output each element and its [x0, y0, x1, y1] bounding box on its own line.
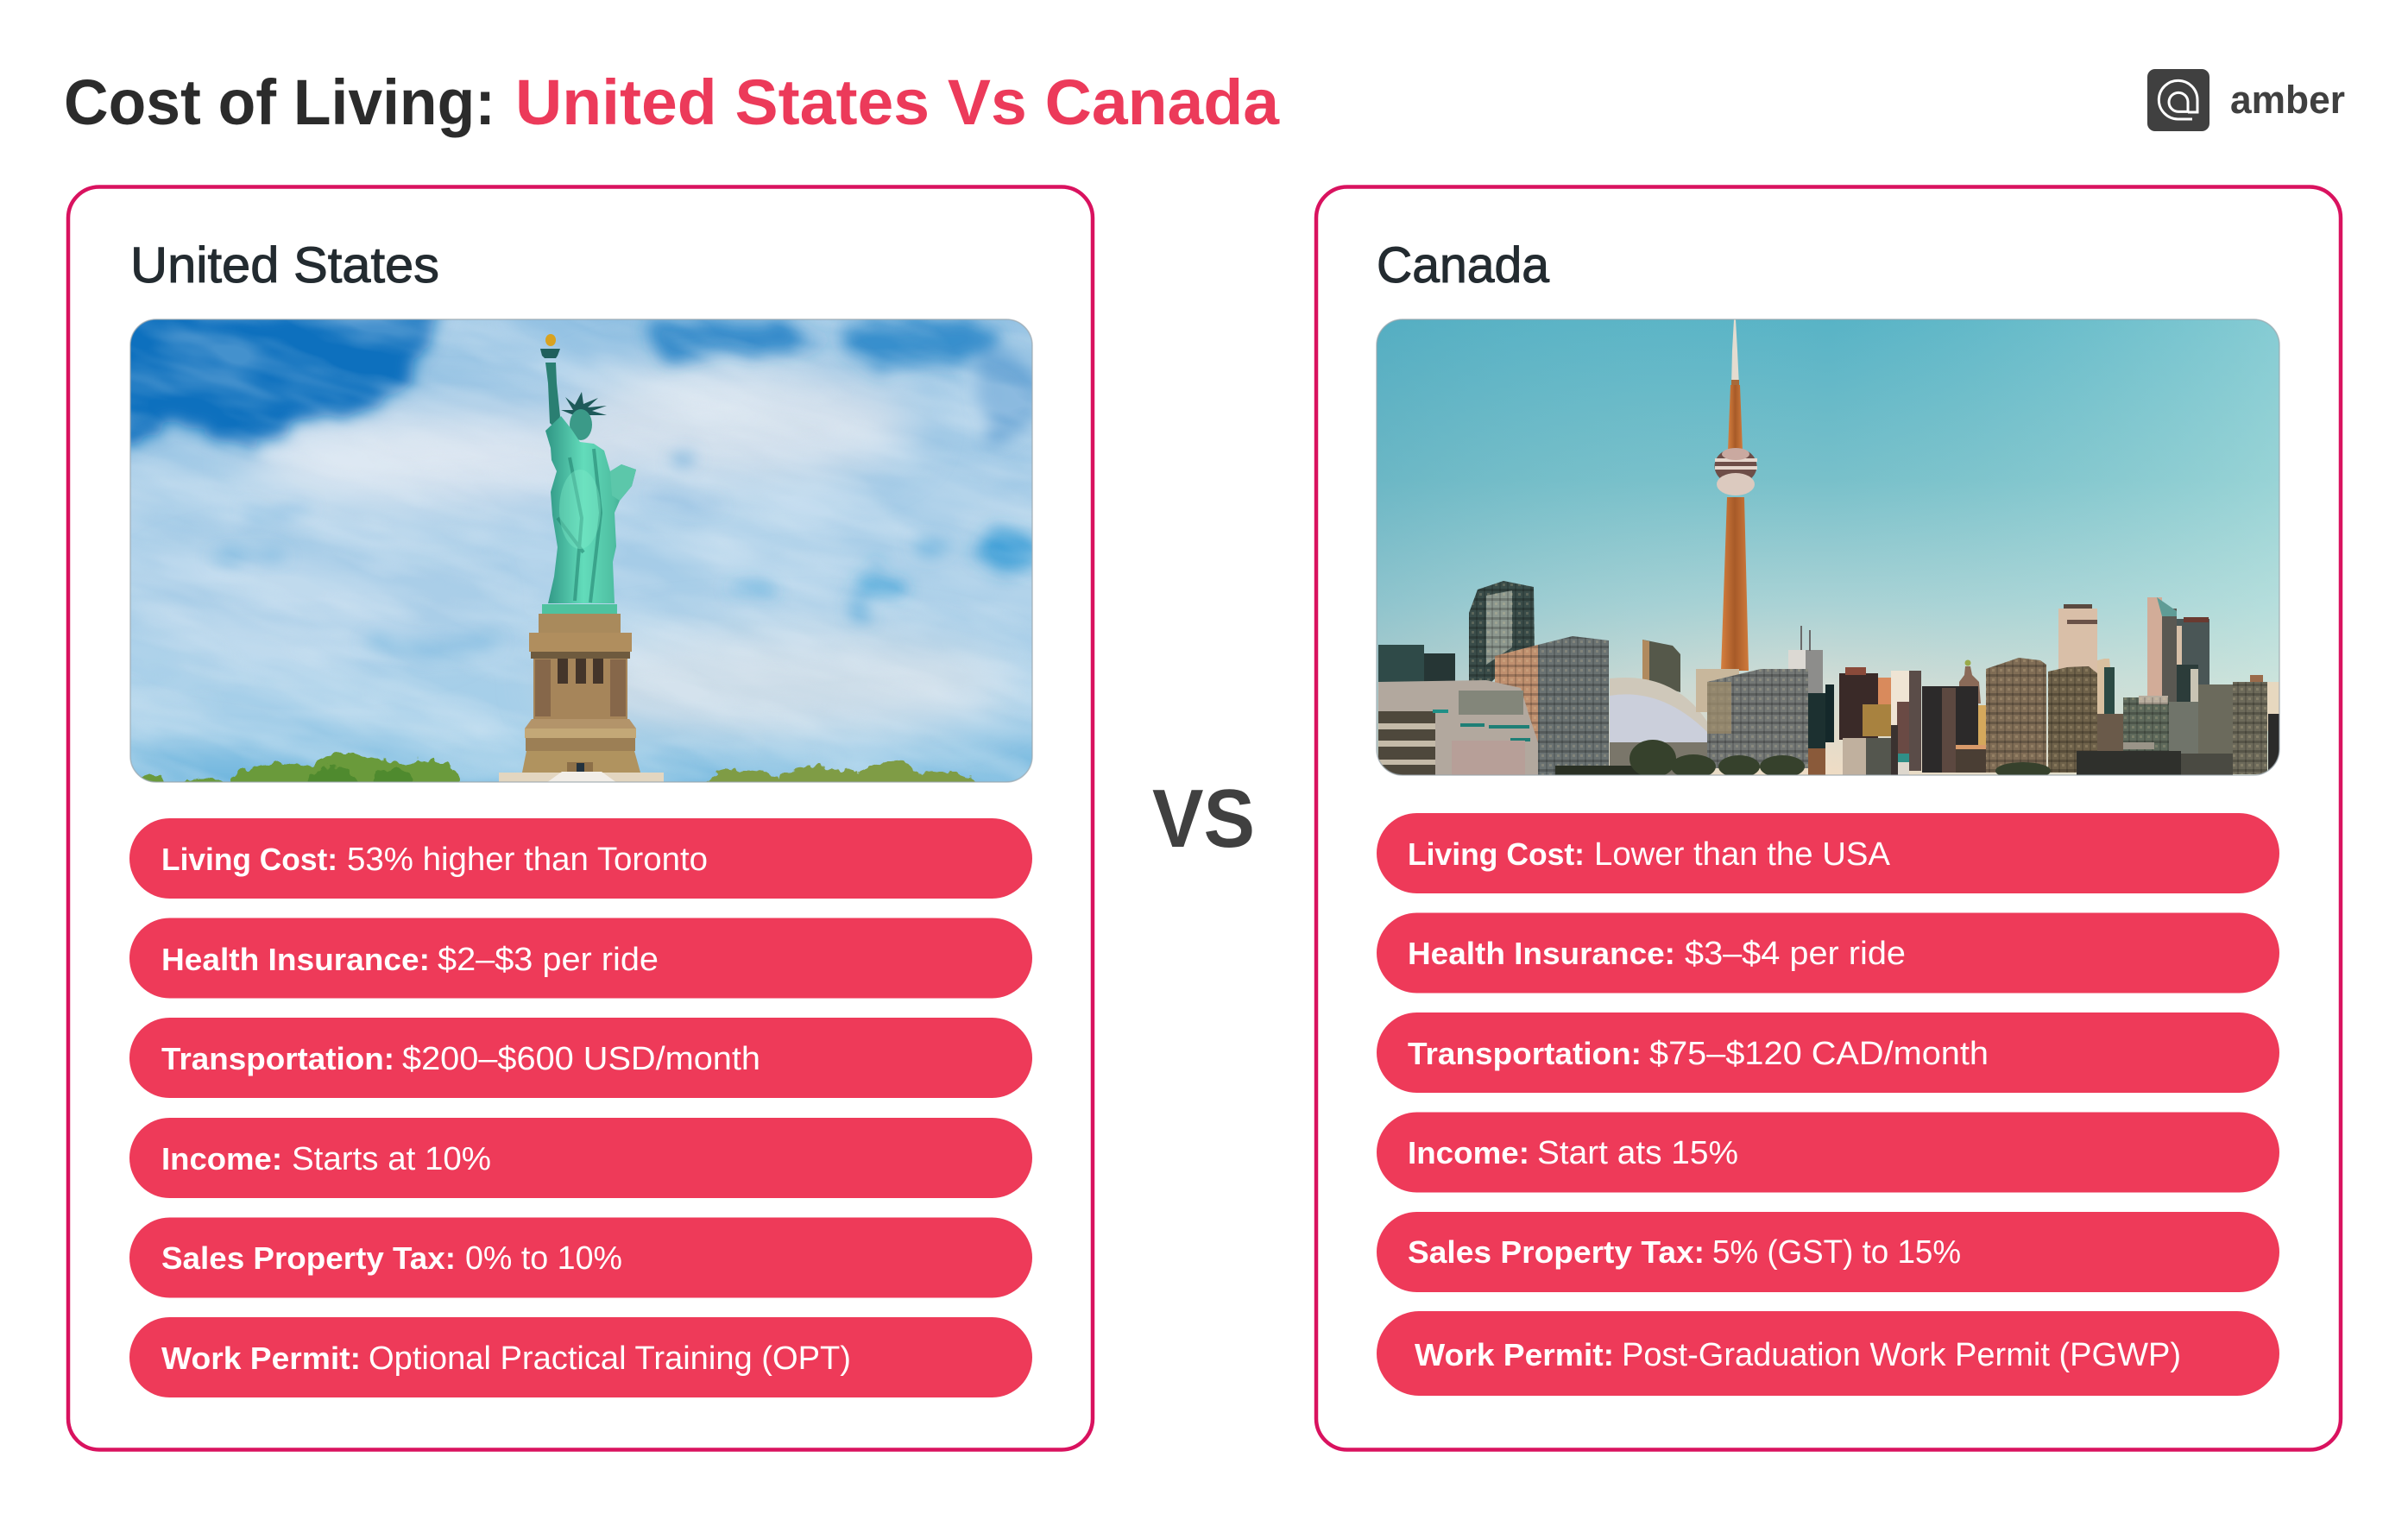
info pill: Health Insurance: [129, 918, 1032, 998]
trees: [142, 752, 975, 782]
info pill: Transportation: [1377, 1012, 2279, 1093]
info pill: Work Permit: Post-Graduation Work Permit (PGWP): [1622, 1337, 2181, 1373]
info pill: Transportation: $200–$600 USD/month: [402, 1041, 760, 1077]
logo icon: [2147, 69, 2209, 131]
statue: [499, 334, 664, 783]
logo: amber: [2147, 69, 2345, 131]
info pill: Health Insurance: Health Insurance:: [161, 942, 430, 977]
info pill: Work Permit: [129, 1317, 1032, 1397]
title: United States Vs Canada: [515, 66, 1280, 138]
info pill: Income: [129, 1118, 1032, 1198]
info pill: Sales Property Tax: [1377, 1212, 2279, 1292]
info pill: Work Permit: Work Permit:: [1415, 1337, 1614, 1372]
info pill: Living Cost: [1377, 813, 2279, 893]
info pill: Work Permit: [1377, 1311, 2279, 1396]
info pill: Living Cost: 53% higher than Toronto: [347, 842, 708, 878]
info pill: Health Insurance: $2–$3 per ride: [438, 942, 659, 978]
title: Cost of Living:: [64, 66, 495, 138]
info pill: Income: Income:: [161, 1141, 282, 1177]
info pill: Transportation: [129, 1018, 1032, 1098]
info pill: Income: Starts at 10%: [292, 1141, 491, 1177]
skyline buildings: [1378, 581, 2279, 779]
info pill: Income: [1377, 1112, 2279, 1193]
info pill: Living Cost: Lower than the USA: [1594, 836, 1891, 873]
info pill: Health Insurance: [1377, 913, 2279, 993]
info pill: Sales Property Tax: 5% (GST) to 15%: [1712, 1234, 1961, 1271]
info pill: Living Cost: Living Cost:: [161, 842, 337, 877]
photo edge: [1377, 319, 2279, 775]
panel: Canada: [1316, 186, 2341, 1450]
info pill: Living Cost: Living Cost:: [1408, 836, 1585, 872]
info pill: Income: Start ats 15%: [1537, 1135, 1738, 1171]
info pill: Transportation: Transportation:: [1408, 1036, 1642, 1071]
info pill: Work Permit: Work Permit:: [161, 1341, 361, 1376]
info pill: Living Cost: [129, 818, 1032, 899]
sky and clouds: [130, 319, 1032, 782]
info pill: Health Insurance: Health Insurance:: [1408, 936, 1675, 971]
info pill: Transportation: Transportation:: [161, 1041, 394, 1076]
panel heading: United States: United States: [130, 237, 439, 293]
photo: Toronto skyline: [1377, 319, 2279, 779]
photo edge: [130, 319, 1032, 782]
info pill: Sales Property Tax: Sales Property Tax:: [161, 1240, 456, 1276]
info pill: Sales Property Tax: 0% to 10%: [465, 1240, 622, 1277]
VS label: VS: [1152, 773, 1255, 865]
panel heading: Canada: Canada: [1377, 237, 1550, 293]
info pill: Work Permit: Optional Practical Training (OPT): [369, 1341, 851, 1377]
info pill: Sales Property Tax: [129, 1217, 1032, 1298]
info pill: Health Insurance: $3–$4 per ride: [1685, 936, 1906, 972]
info pill: Income: Income:: [1408, 1135, 1529, 1170]
panel: United States: [0, 44, 1282, 1450]
photo: Statue of Liberty: [130, 319, 1032, 782]
info pill: Transportation: $75–$120 CAD/month: [1649, 1036, 1989, 1072]
CN Tower: [1714, 319, 1757, 671]
info pill: Sales Property Tax: Sales Property Tax:: [1408, 1234, 1705, 1270]
logo wordmark: amber: [2230, 78, 2345, 122]
